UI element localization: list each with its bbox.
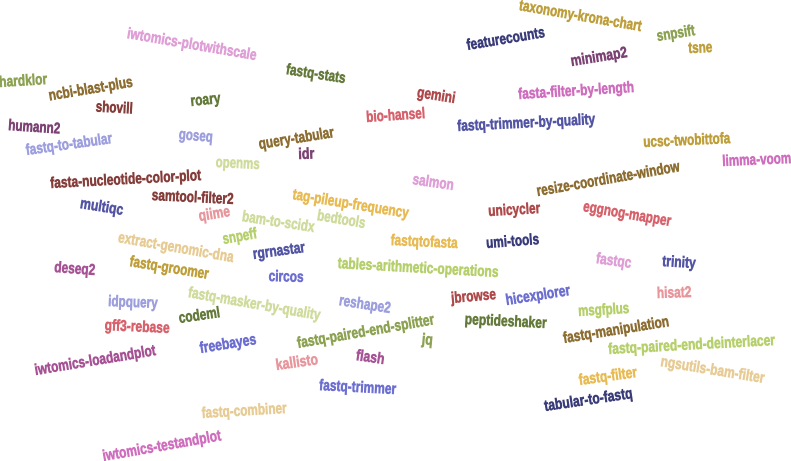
word: fastq-combiner: fastq-combiner bbox=[201, 400, 287, 422]
word: flash: flash bbox=[355, 347, 386, 368]
word: jq: jq bbox=[420, 331, 434, 349]
word: fastq-trimmer: fastq-trimmer bbox=[319, 377, 397, 398]
word: unicycler: unicycler bbox=[488, 200, 541, 220]
word: jbrowse: jbrowse bbox=[450, 286, 497, 307]
word: multiqc: multiqc bbox=[79, 195, 125, 219]
word: extract-genomic-dna: extract-genomic-dna bbox=[117, 229, 235, 266]
word: tabular-to-fastq: tabular-to-fastq bbox=[543, 385, 634, 415]
word: peptideshaker: peptideshaker bbox=[464, 311, 547, 332]
word: idpquery: idpquery bbox=[108, 293, 158, 312]
word: tsne: tsne bbox=[688, 39, 713, 57]
word: salmon: salmon bbox=[411, 171, 455, 194]
word: fastq-to-tabular: fastq-to-tabular bbox=[25, 130, 113, 159]
word: shovill: shovill bbox=[95, 99, 133, 117]
word: umi-tools: umi-tools bbox=[486, 231, 540, 252]
word: kallisto: kallisto bbox=[275, 351, 319, 374]
word: fastqc: fastqc bbox=[595, 250, 633, 272]
word: circos: circos bbox=[268, 268, 304, 286]
word: humann2: humann2 bbox=[8, 117, 61, 138]
word: featurecounts: featurecounts bbox=[465, 24, 546, 54]
word: minimap2: minimap2 bbox=[569, 44, 628, 70]
word: trinity: trinity bbox=[662, 253, 697, 272]
word: goseq: goseq bbox=[178, 126, 214, 146]
word: iwtomics-plotwithscale: iwtomics-plotwithscale bbox=[126, 25, 258, 64]
word: ncbi-blast-plus: ncbi-blast-plus bbox=[47, 74, 134, 104]
word: iwtomics-loadandplot: iwtomics-loadandplot bbox=[33, 342, 157, 379]
word: snpeff: snpeff bbox=[221, 225, 259, 248]
word: fastqtofasta: fastqtofasta bbox=[390, 232, 458, 252]
word: codeml: codeml bbox=[178, 304, 221, 327]
word: openms: openms bbox=[215, 154, 260, 173]
word: fastq-trimmer-by-quality: fastq-trimmer-by-quality bbox=[457, 111, 596, 135]
word: fastq-filter: fastq-filter bbox=[578, 364, 638, 389]
word: tables-arithmetic-operations: tables-arithmetic-operations bbox=[337, 255, 499, 281]
word: bam-to-scidx: bam-to-scidx bbox=[241, 208, 316, 236]
word: fastq-masker-by-quality: fastq-masker-by-quality bbox=[187, 284, 322, 324]
word: samtool-filter2: samtool-filter2 bbox=[151, 187, 234, 208]
word: roary: roary bbox=[190, 90, 222, 110]
word: gemini: gemini bbox=[416, 84, 457, 107]
word: msgfplus: msgfplus bbox=[578, 300, 630, 320]
word: fastq-paired-end-splitter: fastq-paired-end-splitter bbox=[296, 311, 436, 352]
word: bedtools: bedtools bbox=[316, 207, 367, 232]
word: bio-hansel: bio-hansel bbox=[366, 105, 426, 126]
word: tag-pileup-frequency: tag-pileup-frequency bbox=[291, 186, 410, 222]
word: snpsift: snpsift bbox=[655, 22, 696, 45]
word: deseq2: deseq2 bbox=[54, 259, 96, 279]
word: hicexplorer: hicexplorer bbox=[504, 282, 571, 309]
word: query-tabular: query-tabular bbox=[257, 124, 335, 153]
word: reshape2: reshape2 bbox=[338, 292, 392, 317]
word: qiime: qiime bbox=[197, 203, 232, 225]
word: hardklor: hardklor bbox=[0, 71, 48, 91]
word: fasta-filter-by-length: fasta-filter-by-length bbox=[518, 79, 635, 103]
word: gff3-rebase: gff3-rebase bbox=[104, 317, 170, 337]
word: fastq-stats: fastq-stats bbox=[285, 61, 347, 87]
word: ucsc-twobittofa: ucsc-twobittofa bbox=[643, 130, 731, 151]
word: freebayes: freebayes bbox=[198, 331, 257, 357]
word: hisat2: hisat2 bbox=[657, 284, 692, 302]
word: idr: idr bbox=[298, 145, 315, 163]
word: fasta-nucleotide-color-plot: fasta-nucleotide-color-plot bbox=[50, 167, 202, 192]
word: rgrnastar: rgrnastar bbox=[252, 239, 306, 263]
word: fastq-manipulation: fastq-manipulation bbox=[562, 313, 670, 347]
word: eggnog-mapper: eggnog-mapper bbox=[582, 198, 672, 230]
word: resize-coordinate-window: resize-coordinate-window bbox=[535, 158, 682, 200]
word: fastq-groomer: fastq-groomer bbox=[128, 253, 210, 283]
